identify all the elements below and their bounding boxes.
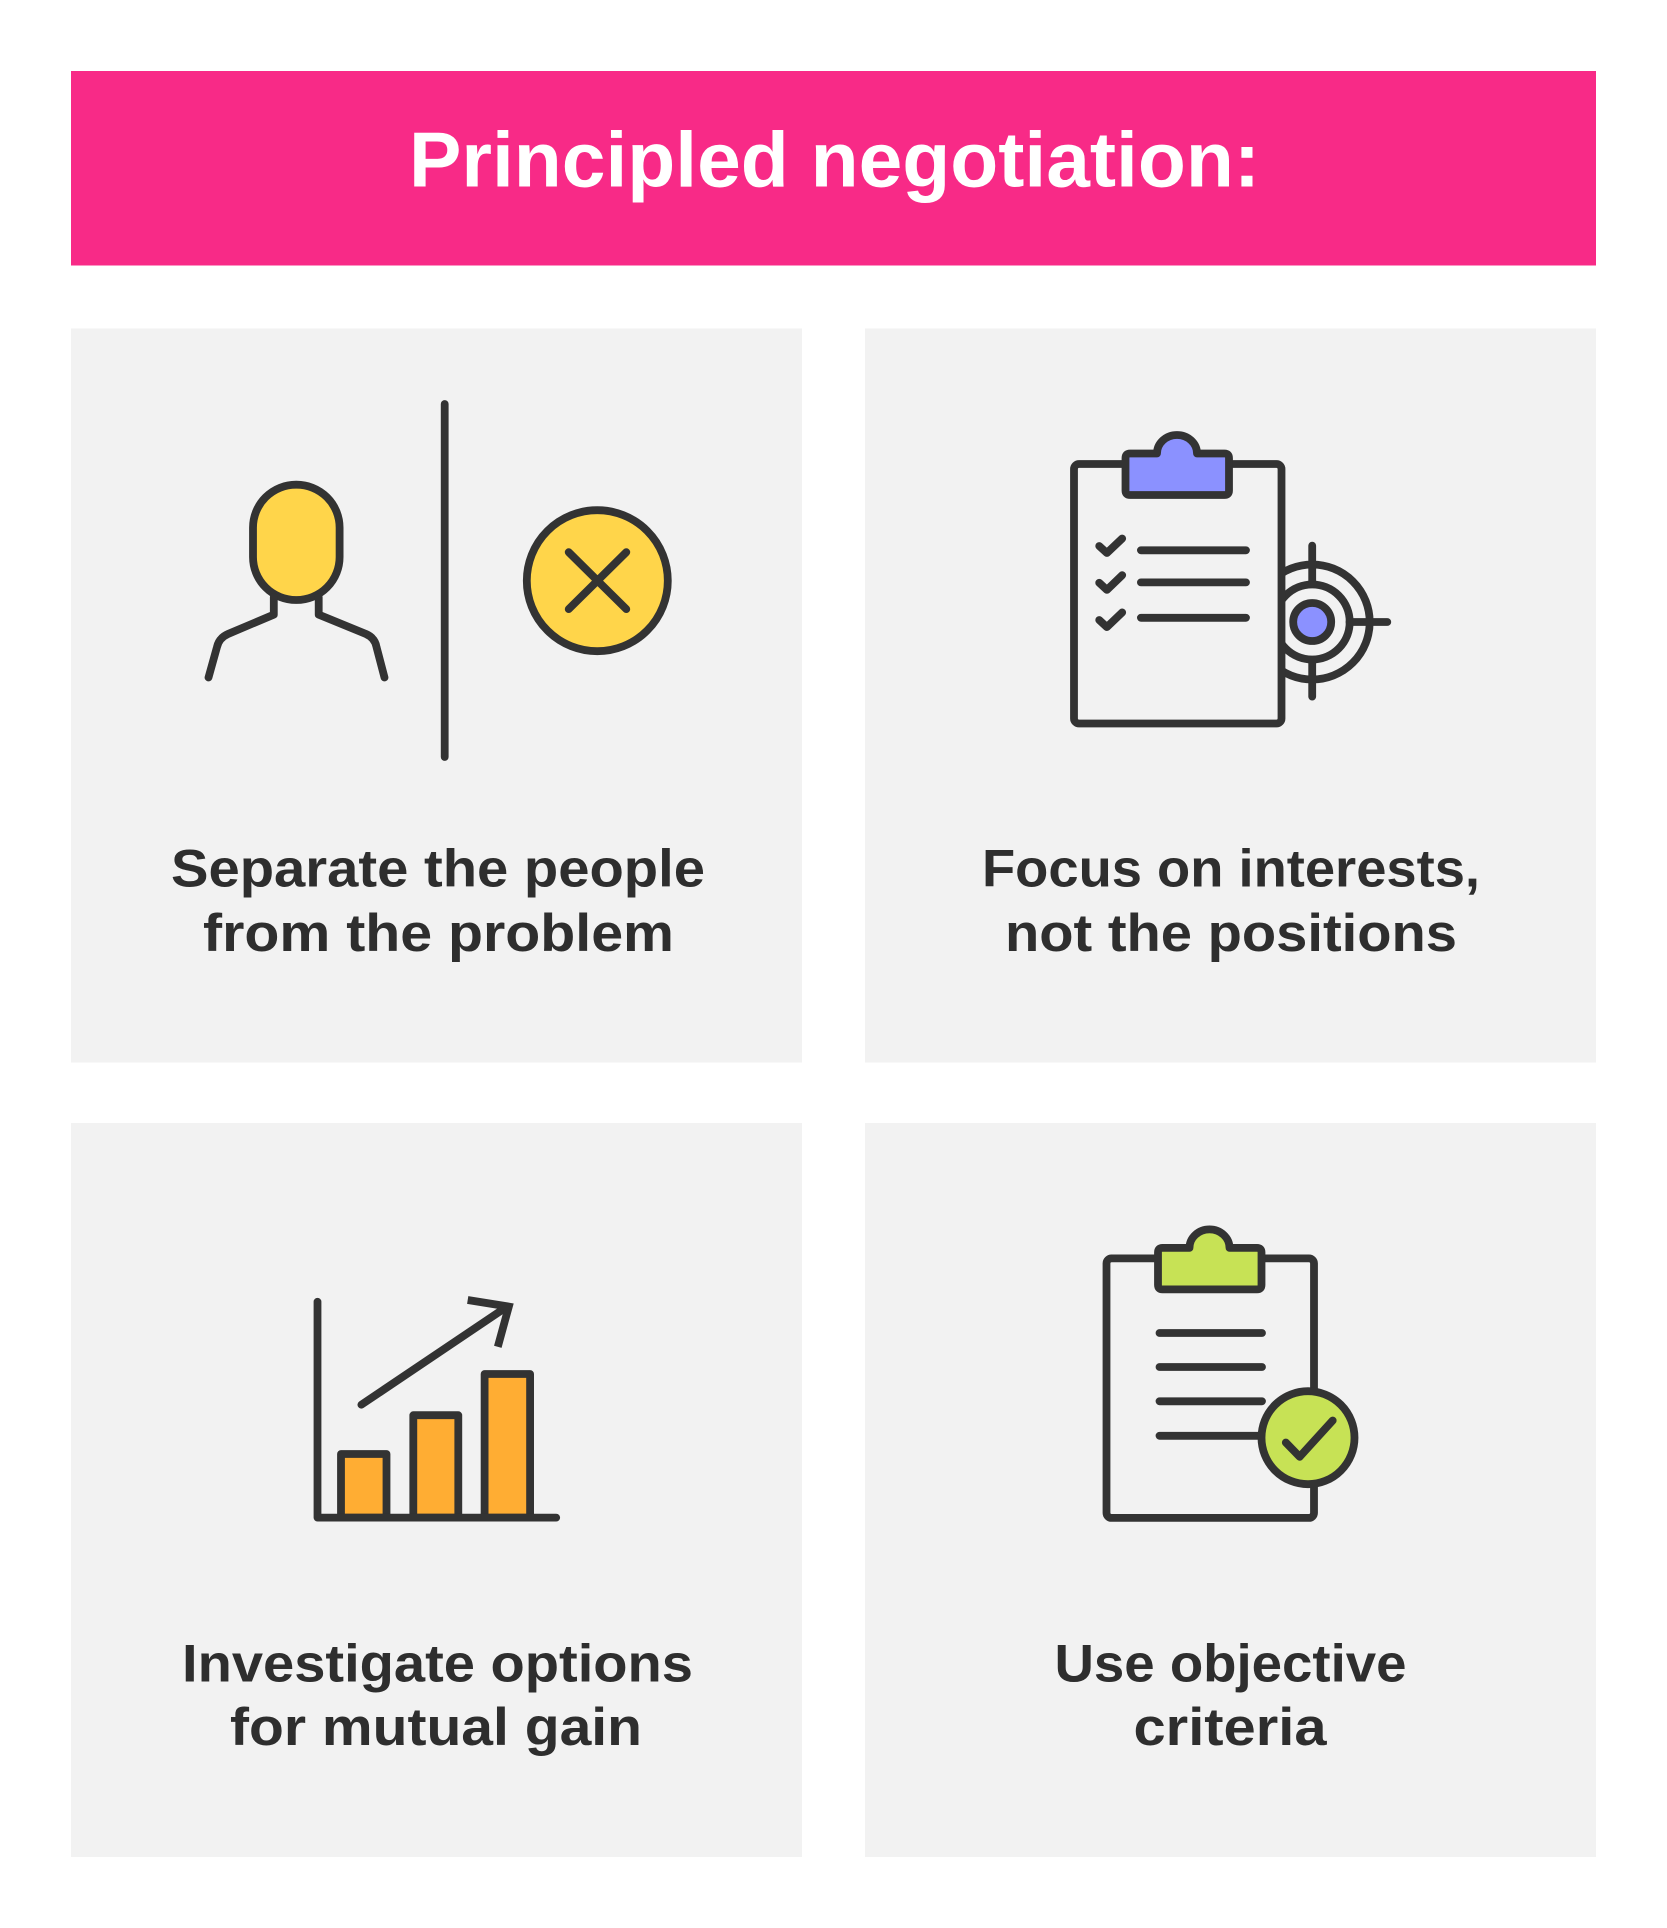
checklist — [1099, 538, 1246, 627]
panel: focus on interests — [865, 328, 1596, 1062]
text lines — [1160, 1333, 1270, 1436]
bars — [341, 1374, 530, 1518]
icon: bar chart with arrow — [318, 1300, 556, 1518]
panel caption — [982, 840, 1480, 963]
panel caption — [182, 1634, 693, 1757]
icon: clipboard with check badge — [1106, 1229, 1354, 1518]
title: Principled negotiation: — [409, 116, 1260, 204]
icon: clipboard — [1074, 435, 1282, 724]
icon: cross in circle — [527, 510, 668, 651]
panel caption: Investigate options — [182, 1634, 693, 1694]
panel caption: Use objective — [1054, 1634, 1406, 1694]
panel caption: criteria — [1134, 1698, 1327, 1757]
icon: checklist clipboard with target — [1074, 435, 1387, 724]
panel caption: for mutual gain — [230, 1698, 642, 1757]
axes — [318, 1302, 556, 1518]
icon: person — [208, 485, 384, 678]
panel caption: Separate the people — [171, 840, 705, 898]
icon: person, divider and cross — [208, 404, 668, 757]
icon: clipboard — [1106, 1229, 1314, 1518]
panel caption: Focus on interests, — [982, 840, 1480, 898]
title banner — [71, 71, 1596, 266]
panel caption: not the positions — [1005, 904, 1457, 963]
divider line — [441, 404, 449, 757]
panel caption — [1054, 1634, 1406, 1757]
panel caption — [171, 840, 705, 963]
panel caption: from the problem — [203, 904, 674, 963]
icon: check badge — [1262, 1391, 1354, 1484]
panel: investigate options — [71, 1123, 802, 1857]
icon: target — [1255, 546, 1387, 697]
arrow — [361, 1300, 509, 1405]
panel: use objective criteria — [865, 1123, 1596, 1857]
panel: separate the people from the problem — [71, 328, 802, 1062]
